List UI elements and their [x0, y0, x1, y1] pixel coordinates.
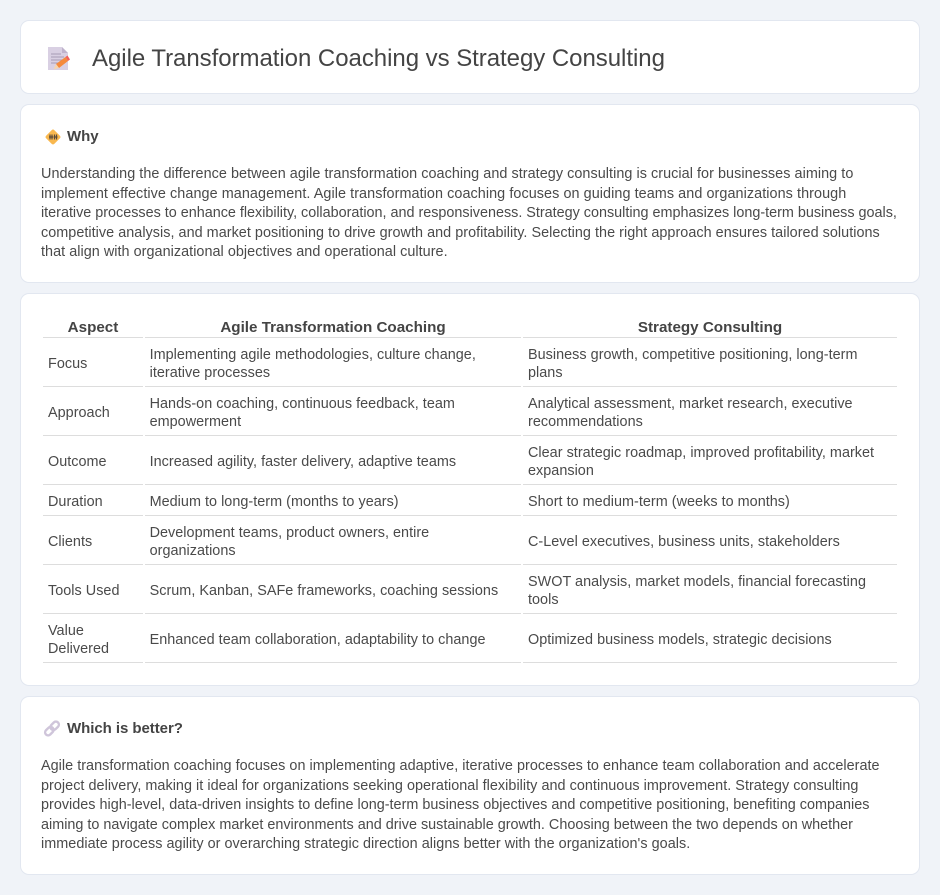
comparison table: Focus — [48, 356, 87, 372]
comparison table: Clients — [48, 534, 92, 550]
comparison table: Business growth, competitive positioning, long-term — [528, 347, 857, 363]
text block: why: iterative processes to enhance flexibility, collaboration, and responsiveness. Strategy consulting emphasizes long-term business goals, — [41, 205, 897, 221]
icon: memo with pencil — [48, 47, 70, 70]
comparison table: Tools Used — [48, 583, 120, 599]
comparison table: Value — [48, 623, 84, 639]
comparison table: Agile Transformation Coaching — [220, 319, 446, 336]
panel: why — [20, 104, 920, 283]
comparison table: Delivered — [48, 641, 109, 657]
comparison table: Optimized business models, strategic decisions — [528, 632, 832, 648]
comparison table: Scrum, Kanban, SAFe frameworks, coaching sessions — [150, 583, 498, 599]
comparison table: Short to medium-term (weeks to months) — [528, 494, 790, 510]
comparison table: Medium to long-term (months to years) — [150, 494, 399, 510]
heading: which is better: Which is better? — [67, 720, 183, 737]
text block: why: implement effective change management. Agile transformation coaching focuses on guiding teams and organizations through — [41, 186, 846, 202]
text block: which is better: project delivery, making it ideal for organizations seeking operational flexibility and continuous improvement. Strategy consulting — [41, 778, 858, 794]
text block: which is better: immediate process agility or overarching strategic direction aligns better with the organization's goals. — [41, 836, 690, 852]
text block: which is better: Agile transformation coaching focuses on implementing adaptive, iterative processes to enhance team collaboration and accelerate — [41, 758, 880, 774]
text block: why: competitive analysis, and market positioning to drive growth and profitability. Selecting the right approach ensures tailored solutions — [41, 224, 880, 240]
comparison table: Approach — [48, 405, 110, 421]
comparison table: Duration — [48, 494, 103, 510]
comparison table: recommendations — [528, 414, 643, 430]
comparison table: plans — [528, 365, 563, 381]
comparison table: tools — [528, 592, 559, 608]
comparison table: iterative processes — [150, 365, 270, 381]
comparison table: Enhanced team collaboration, adaptability to change — [150, 632, 486, 648]
comparison table: Hands-on coaching, continuous feedback, team — [150, 396, 455, 412]
comparison table: Increased agility, faster delivery, adaptive teams — [150, 454, 456, 470]
comparison table: Clear strategic roadmap, improved profitability, market — [528, 445, 874, 461]
comparison table: Development teams, product owners, entire — [150, 525, 429, 541]
text block: why — [41, 166, 897, 260]
text block: which is better: aiming to navigate complex market environments and drive sustainable growth. Choosing between the two depends on whether — [41, 816, 853, 832]
panel: which is better — [20, 696, 920, 875]
comparison table — [43, 319, 897, 663]
comparison table: C-Level executives, business units, stakeholders — [528, 534, 840, 550]
text block: which is better: provides high-level, data-driven insights to define long-term business objectives and competitive positioning, benefiting companies — [41, 797, 869, 813]
comparison table: empowerment — [150, 414, 241, 430]
text block: which is better — [41, 758, 880, 852]
comparison table: Implementing agile methodologies, culture change, — [150, 347, 476, 363]
comparison table: Outcome — [48, 454, 107, 470]
comparison table: Analytical assessment, market research, executive — [528, 396, 853, 412]
comparison table: SWOT analysis, market models, financial forecasting — [528, 574, 866, 590]
comparison table: Aspect — [68, 319, 118, 336]
header card — [20, 20, 920, 94]
panel: comparison table — [20, 293, 920, 686]
icon: link — [44, 720, 60, 737]
comparison table: organizations — [150, 543, 236, 559]
text block: why: Understanding the difference between agile transformation coaching and strategy consulting is crucial for businesses aiming to — [41, 166, 853, 182]
heading: why: Why — [67, 128, 99, 145]
title: Agile Transformation Coaching vs Strategy Consulting — [92, 45, 665, 72]
comparison table: expansion — [528, 463, 594, 479]
text block: why: that align with organizational objectives and operational culture. — [41, 244, 448, 260]
comparison table: Strategy Consulting — [638, 319, 782, 336]
icon: diamond sign — [46, 130, 60, 144]
